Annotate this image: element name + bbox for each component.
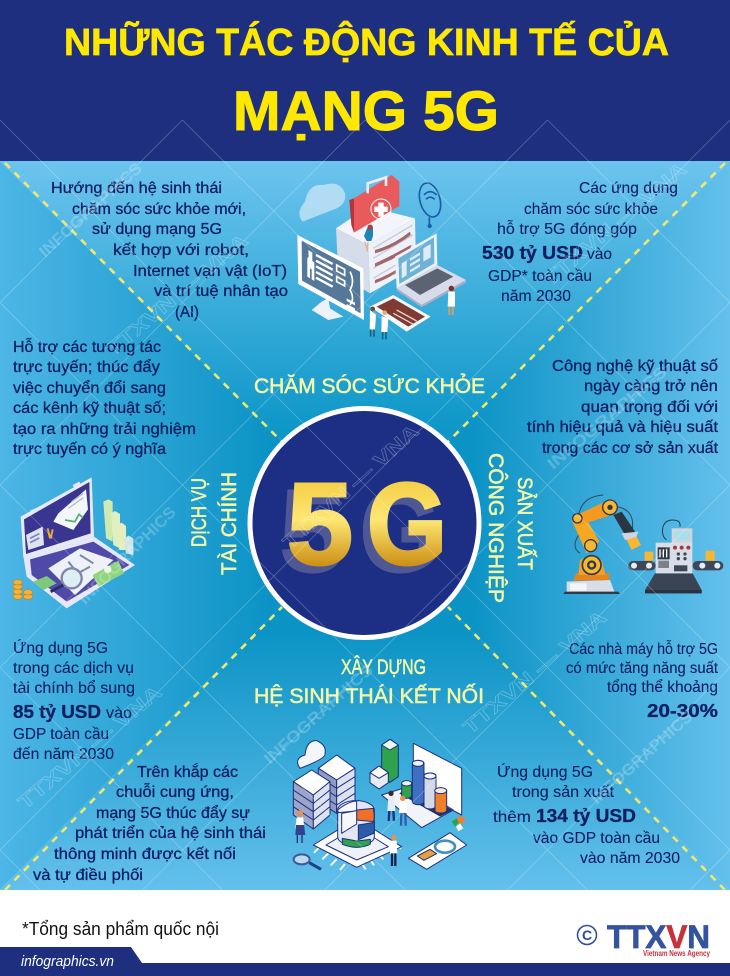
illustration: financial briefcase	[13, 477, 135, 608]
header band	[0, 0, 730, 161]
footer	[0, 890, 730, 976]
centre circle with 5G: G	[360, 466, 440, 596]
text block: manufacturing contribution: Ứng dụng 5G	[497, 762, 593, 781]
first aid kit	[349, 175, 399, 233]
chip with pie chart	[313, 801, 402, 870]
text block: healthcare ecosystem: (AI)	[175, 304, 199, 321]
watermark text: TTXVN — VNA	[15, 682, 166, 814]
text block: healthcare contribution: GDP* toàn cầu	[488, 268, 592, 285]
section label: industrial manufacturing: SẢN XUẤT	[513, 477, 538, 570]
text block: financial services support: Hỗ trợ các tương tác	[13, 337, 161, 356]
bar blocks	[370, 739, 398, 789]
bar chart	[103, 499, 133, 555]
text block: healthcare contribution: 530 tỷ USD	[482, 243, 583, 263]
conveyor machine	[628, 520, 723, 593]
section label: connected ecosystem: XÂY DỰNG	[341, 654, 426, 679]
text block: supply chains: phát triển của hệ sinh thái	[75, 824, 266, 842]
text block: financial services support: trực tuyến; thúc đẩy	[13, 358, 160, 376]
server tower	[336, 207, 416, 293]
centre circle with 5G: 5	[287, 459, 353, 589]
text block: digital technology in manufacturing: trong các cơ sở sản xuất	[542, 440, 719, 457]
smartphone	[370, 295, 431, 332]
small cubes	[452, 816, 466, 831]
website: infographics.vn	[21, 953, 114, 970]
dashed diagonals meeting at centre circle	[5, 163, 725, 890]
text block: financial contribution: Ứng dụng 5G	[13, 638, 108, 657]
text block: healthcare ecosystem: kết hợp với robot,	[113, 242, 249, 259]
centre circle with 5G: 5	[280, 466, 346, 596]
laptop with cylinder chart	[382, 743, 462, 828]
text block: digital technology in manufacturing: tính hiệu quả và hiệu suất	[527, 419, 719, 436]
server racks	[293, 755, 355, 829]
laptop	[395, 233, 466, 307]
centre circle with 5G: G	[367, 459, 447, 589]
monitor with body scan	[297, 235, 364, 320]
illustration: healthcare devices	[297, 175, 466, 339]
small people	[295, 791, 407, 866]
text block: financial contribution: tài chính bổ sung	[13, 679, 135, 697]
text block: digital technology in manufacturing: ngày càng trở nên	[584, 378, 718, 395]
watermark text: TTXVN — VNA	[460, 607, 611, 739]
section label: connected ecosystem	[254, 654, 484, 708]
text block: digital technology in manufacturing	[527, 358, 719, 457]
centre circle with 5G	[250, 408, 479, 638]
text block: healthcare ecosystem	[51, 180, 288, 321]
text block: factory productivity: tổng thể khoảng	[607, 678, 718, 696]
text block: healthcare contribution: chăm sóc sức khỏe	[524, 201, 658, 218]
text block: financial contribution: vào	[106, 705, 132, 722]
text block: financial contribution	[13, 638, 135, 763]
text block: manufacturing contribution: vào năm 2030	[580, 850, 680, 867]
logo: TTXVN: TTXVN	[607, 919, 710, 955]
text block: financial contribution: GDP toàn cầu	[13, 726, 109, 743]
watermark text: INFOGRAPHICS	[36, 160, 146, 261]
watermark text: INFOGRAPHICS	[588, 708, 697, 808]
text block: supply chains	[33, 762, 266, 884]
title	[64, 19, 669, 142]
text block: healthcare ecosystem: chăm sóc sức khỏe mới,	[72, 201, 246, 218]
icon: cloud	[299, 184, 345, 222]
panel: blue background with four triangular quadrants	[0, 161, 730, 890]
text block: factory productivity: có mức tăng năng suất	[566, 660, 719, 677]
briefcase lid	[21, 477, 94, 557]
icon: cloud	[298, 741, 325, 768]
section label: connected ecosystem: HỆ SINH THÁI KẾT NỐI	[254, 682, 484, 708]
text block: financial services support: việc chuyển đổi sang	[13, 379, 166, 397]
section label: financial services: DỊCH VỤ	[187, 478, 211, 547]
text block: financial contribution: trong các dịch vụ	[13, 660, 134, 677]
text block: financial services support	[13, 337, 196, 458]
title: MẠNG 5G	[233, 79, 499, 142]
smartphone with charts	[408, 833, 467, 869]
section label: healthcare: CHĂM SÓC SỨC KHỎE	[254, 373, 485, 398]
watermark text	[15, 159, 697, 814]
watermark text: TTXVN — VNA	[279, 421, 424, 554]
text block: supply chains: thông minh được kết nối	[54, 846, 236, 863]
text block: healthcare ecosystem: sử dụng mạng 5G	[92, 221, 222, 238]
text block: supply chains: chuỗi cung ứng,	[116, 782, 234, 801]
text block: financial contribution: 85 tỷ USD	[13, 702, 101, 722]
text block: manufacturing contribution: 134 tỷ USD	[536, 806, 636, 826]
people	[364, 225, 455, 339]
text block: digital technology in manufacturing: quan trọng đối với	[581, 399, 718, 416]
text block: factory productivity	[566, 639, 719, 721]
text block: manufacturing contribution	[493, 762, 680, 867]
watermark text: TTXVN — VNA	[103, 230, 253, 361]
text block: healthcare contribution: Các ứng dụng	[579, 180, 678, 197]
title: NHỮNG TÁC ĐỘNG KINH TẾ CỦA	[64, 19, 669, 64]
watermark text: TTXVN — VNA	[540, 159, 691, 291]
icon: wifi signal	[416, 181, 444, 227]
section label: industrial manufacturing	[484, 453, 538, 603]
section label: financial services: TÀI CHÍNH	[216, 472, 241, 575]
text block: healthcare ecosystem: và trí tuệ nhân tạo	[154, 283, 288, 300]
text block: manufacturing contribution: trong sản xuất	[512, 784, 615, 801]
text block: digital technology in manufacturing: Công nghệ kỹ thuật số	[552, 358, 718, 375]
section label: industrial manufacturing: CÔNG NGHIỆP	[484, 453, 509, 603]
watermark text: INFOGRAPHICS	[545, 363, 671, 473]
text block: supply chains: và tự điều phối	[33, 867, 143, 884]
coins	[13, 580, 33, 599]
text block: manufacturing contribution: vào GDP toàn cầu	[533, 830, 660, 847]
text block: financial contribution: đến năm 2030	[13, 746, 114, 763]
text block: financial services support: các kênh kỹ thuật số;	[13, 400, 166, 417]
robot arm	[563, 495, 641, 594]
text block: financial services support: trực tuyến có ý nghĩa	[13, 441, 166, 458]
watermark text: INFOGRAPHICS	[261, 661, 377, 768]
text block: healthcare contribution: hỗ trợ 5G đóng góp	[497, 219, 637, 238]
logo: TTXVN: C	[582, 927, 592, 943]
text block: supply chains: Trên khắp các	[137, 762, 238, 781]
magnifying glass	[294, 854, 321, 869]
footnote: *Tổng sản phẩm quốc nội	[22, 918, 219, 939]
text block: healthcare contribution: vào	[587, 246, 612, 263]
text block: supply chains: mạng 5G thúc đẩy sự	[96, 804, 250, 822]
section label: financial services	[187, 472, 241, 575]
illustration: robot arm and conveyor machine	[563, 495, 723, 594]
text block: healthcare ecosystem: Hướng đến hệ sinh thái	[51, 180, 222, 197]
text block: manufacturing contribution: thêm	[493, 809, 531, 826]
briefcase base with documents	[23, 537, 135, 608]
watermark text: INFOGRAPHICS	[76, 504, 180, 608]
watermark lattice	[0, 120, 730, 890]
text block: healthcare ecosystem: Internet vạn vật (IoT)	[133, 263, 287, 280]
text block: healthcare contribution: năm 2030	[501, 288, 571, 305]
text block: factory productivity: 20-30%	[647, 701, 718, 721]
text block: financial services support: tạo ra những trải nghiệm	[13, 421, 196, 438]
illustration: connected ecosystem	[293, 739, 467, 870]
text block: healthcare contribution	[482, 180, 678, 305]
